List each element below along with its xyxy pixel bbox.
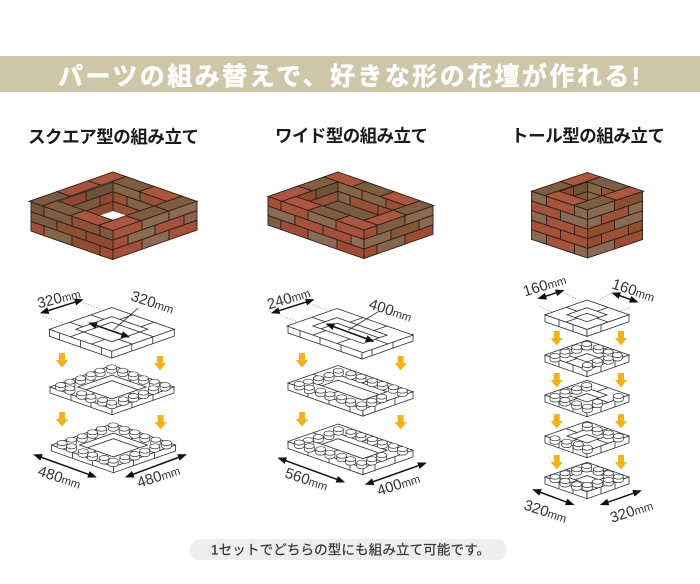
wide diagram: bottom studded layer xyxy=(288,424,413,475)
square diagram: top layer xyxy=(49,308,174,358)
arrows: assembly direction xyxy=(56,331,627,470)
note pill xyxy=(190,539,507,560)
dimensions: square: 480mm xyxy=(36,463,83,493)
tall diagram: layer 2 xyxy=(545,340,629,377)
brick planter: square xyxy=(29,172,197,260)
header band xyxy=(0,56,700,92)
heading: tall type: トール型の組み立て xyxy=(511,126,665,146)
brick planter: tall xyxy=(532,172,644,258)
heading: wide type: ワイド型の組み立て xyxy=(275,126,428,146)
header title: パーツの組み替えで、好きな形の花壇が作れる! xyxy=(58,62,640,91)
square diagram: middle studded layer xyxy=(50,365,174,415)
dimensions: tall: 160mm xyxy=(610,276,657,306)
brick planter: wide xyxy=(268,172,434,259)
heading: square type: スクエア型の組み立て xyxy=(28,127,199,147)
tall diagram: layer 4 xyxy=(545,421,629,458)
dimensions: square: 320mm xyxy=(129,288,176,318)
dimensions: wide: 400mm xyxy=(367,296,414,326)
tall diagram: top layer xyxy=(545,300,629,336)
dimensions: square: 480mm xyxy=(135,462,182,492)
dimensions: wide: 240mm xyxy=(265,284,312,313)
tall diagram: layer 5 xyxy=(545,462,629,499)
dimensions: wide xyxy=(265,284,425,500)
dimensions: tall: 160mm xyxy=(521,271,568,300)
wide diagram: middle studded layer xyxy=(288,366,413,416)
wide diagram: top layer xyxy=(287,308,413,359)
note text: 1セットでどちらの型にも組み立て可能です。 xyxy=(211,542,490,558)
square diagram: bottom studded layer xyxy=(52,423,176,473)
dimensions: tall: 320mm xyxy=(522,497,569,527)
dimensions: tall xyxy=(521,271,657,527)
dimensions: square: 320mm xyxy=(35,285,82,312)
dimensions: wide: 560mm xyxy=(283,465,330,495)
tall diagram: layer 3 xyxy=(545,380,629,417)
dimensions: tall: 320mm xyxy=(608,497,655,527)
dimensions: square xyxy=(35,285,185,493)
dimensions: wide: 400mm xyxy=(375,470,422,500)
